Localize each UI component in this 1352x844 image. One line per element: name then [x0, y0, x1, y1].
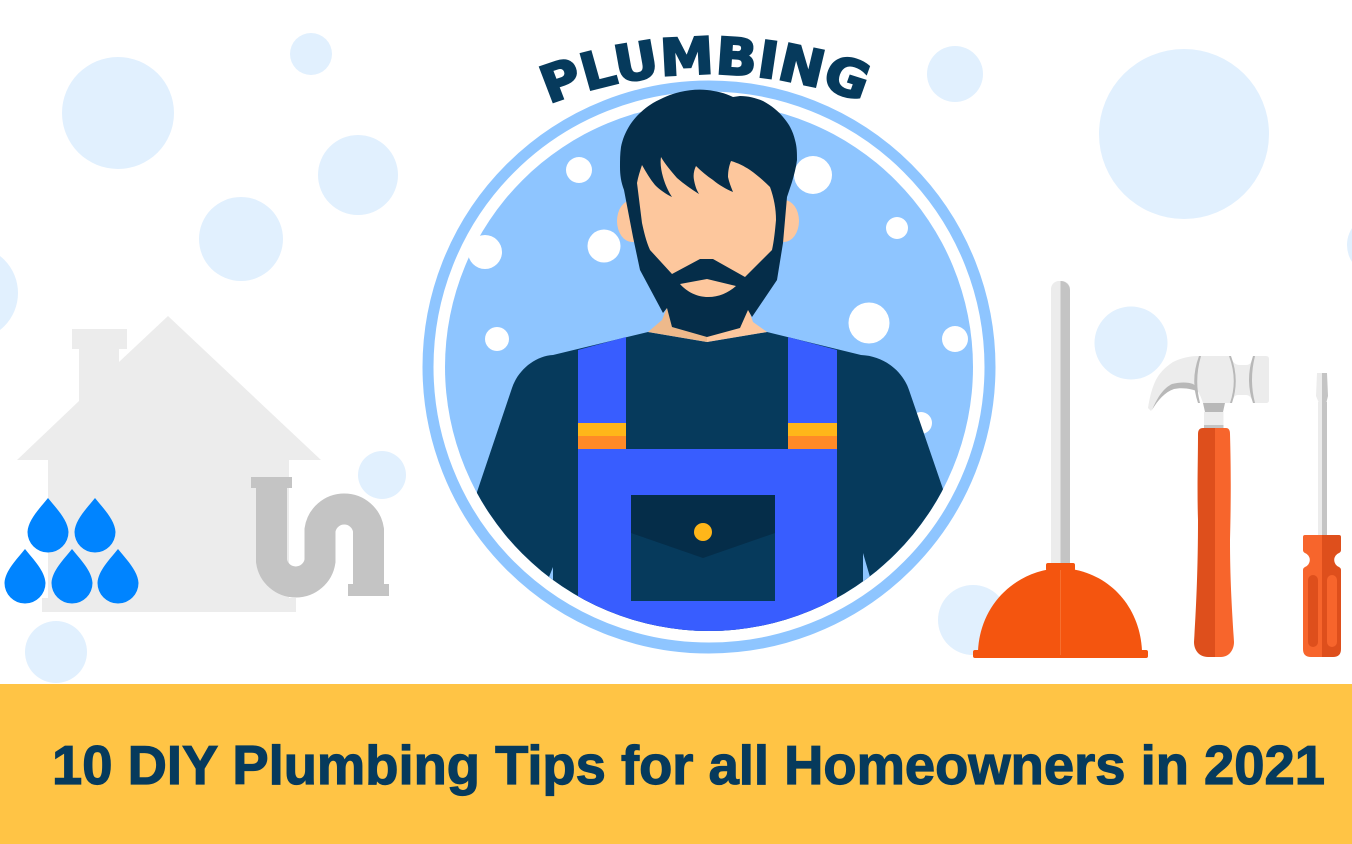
icon: drain pipe — [251, 477, 389, 596]
overall straps and bib — [578, 337, 837, 660]
face — [637, 157, 776, 277]
plumber body — [477, 332, 944, 660]
circle inner disc — [445, 103, 973, 631]
sleeve slivers — [549, 553, 870, 584]
icon: screwdriver — [1303, 373, 1341, 657]
neck — [648, 305, 767, 342]
icon: house silhouette — [17, 316, 321, 612]
mouth — [680, 279, 736, 297]
ears — [617, 200, 799, 242]
circle outer ring — [428, 86, 990, 648]
disc bubbles — [468, 156, 968, 434]
strap buckle bands — [578, 423, 837, 449]
banner title text: 10 DIY Plumbing Tips for all Homeowners in 2021 — [52, 734, 1325, 796]
plumbing curved heading: PLUMBING — [538, 35, 870, 104]
background bubbles — [0, 33, 1352, 683]
hair and beard — [620, 90, 797, 337]
shirt — [477, 332, 944, 660]
bib pocket — [631, 495, 775, 601]
icon: water drops — [4, 498, 138, 604]
title banner — [0, 684, 1352, 844]
icon: hammer — [1148, 356, 1269, 657]
icon: plunger — [973, 281, 1148, 658]
panel: plumber portrait circle — [428, 86, 990, 660]
